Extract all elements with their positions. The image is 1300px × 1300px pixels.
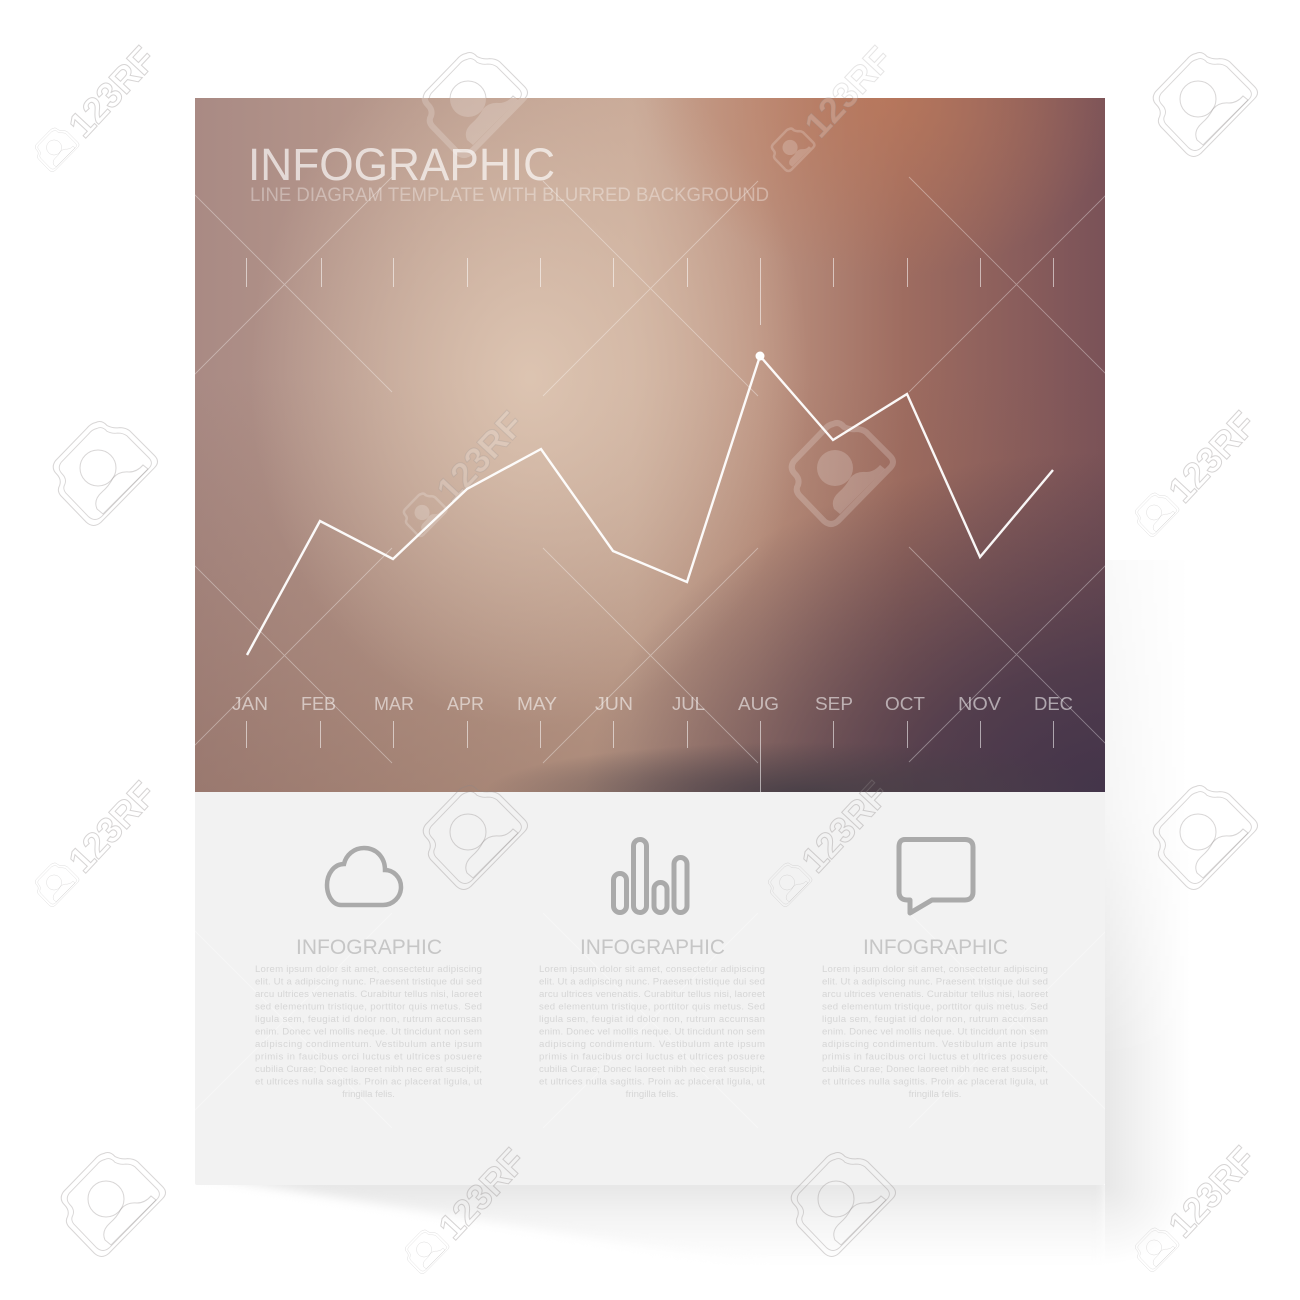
- watermark overlay: 123RF: [60, 773, 164, 880]
- watermark overlay: 123RF: [60, 38, 164, 145]
- column 3 body: adipiscing condimentum. Vestibulum ante ipsum: [822, 1039, 1048, 1050]
- month labels: JUN: [595, 694, 633, 714]
- column 1 body: enim. Donec vel mollis neque. Ut tincidunt non sem: [255, 1026, 482, 1037]
- watermark overlay: 123RF: [430, 1140, 534, 1247]
- column 3 body: et ultrices nulla sagittis. Proin ac placerat ligula, ut: [822, 1076, 1048, 1087]
- month labels: SEP: [815, 694, 853, 714]
- column 1 body: primis in faucibus orci luctus et ultrices posuere: [255, 1051, 482, 1062]
- column 2 heading: INFOGRAPHIC: [580, 936, 725, 959]
- icon: bar chart: [614, 840, 687, 912]
- watermark overlay: 123RF: [796, 38, 900, 145]
- month labels: JAN: [232, 694, 268, 714]
- column 1 text: [255, 936, 482, 1100]
- column 3 body: elit. Ut a adipiscing nunc. Praesent tristique dui sed: [822, 976, 1048, 988]
- column 3 body: sed elementum tristique, porttitor quis metus. Sed: [822, 1001, 1048, 1012]
- watermark overlay: 123RF: [793, 773, 897, 880]
- watermark overlay: 123RF: [1160, 403, 1264, 510]
- watermark overlay: 123RF: [428, 403, 532, 510]
- month labels: AUG: [738, 694, 779, 714]
- line chart: [247, 352, 1053, 655]
- column 2 text: [539, 936, 765, 1100]
- column 1 heading: INFOGRAPHIC: [296, 936, 442, 959]
- column 2 body: ligula sem, feugiat id dolor non, rutrum accumsan: [539, 1014, 765, 1025]
- month labels: APR: [447, 694, 484, 714]
- column 3 body: ligula sem, feugiat id dolor non, rutrum accumsan: [822, 1014, 1048, 1025]
- column 1 body: et ultrices nulla sagittis. Proin ac placerat ligula, ut: [255, 1076, 482, 1087]
- month labels: NOV: [958, 694, 1001, 714]
- column 1 body: arcu ultrices venenatis. Curabitur tellus nisi, laoreet: [255, 989, 482, 1000]
- icon: speech bubble: [899, 840, 973, 913]
- top tick marks: [246, 258, 1054, 325]
- month labels: MAY: [517, 694, 557, 714]
- column 1 body: Lorem ipsum dolor sit amet, consectetur adipiscing: [255, 964, 482, 975]
- highlighted data point: [756, 352, 764, 360]
- column 3 body: Lorem ipsum dolor sit amet, consectetur adipiscing: [822, 964, 1048, 975]
- column 3 body: arcu ultrices venenatis. Curabitur tellus nisi, laoreet: [822, 989, 1048, 1000]
- column 3 text: [822, 936, 1048, 1100]
- subtitle: LINE DIAGRAM TEMPLATE WITH BLURRED BACKGROUND: [250, 185, 769, 206]
- month labels: OCT: [885, 694, 925, 714]
- column 2 body: Lorem ipsum dolor sit amet, consectetur adipiscing: [539, 964, 765, 975]
- bottom tick marks: [246, 721, 1054, 792]
- drop shadow under the sheet: [248, 734, 1158, 1236]
- watermark overlay: 123RF: [1160, 1138, 1264, 1245]
- column 1 body: adipiscing condimentum. Vestibulum ante ipsum: [255, 1039, 482, 1050]
- column 2 body: adipiscing condimentum. Vestibulum ante ipsum: [539, 1039, 765, 1050]
- icon: cloud: [327, 848, 401, 905]
- column 3 body: fringilla felis.: [909, 1089, 961, 1100]
- month labels: [232, 694, 1073, 714]
- column 2 body: et ultrices nulla sagittis. Proin ac placerat ligula, ut: [539, 1076, 765, 1087]
- header text: [248, 139, 769, 206]
- column 3 body: [822, 964, 1048, 1100]
- column 1 body: ligula sem, feugiat id dolor non, rutrum accumsan: [255, 1014, 482, 1025]
- month labels: DEC: [1034, 694, 1073, 714]
- column 2 body: elit. Ut a adipiscing nunc. Praesent tristique dui sed: [539, 976, 765, 988]
- column 1 body: sed elementum tristique, porttitor quis metus. Sed: [255, 1001, 482, 1012]
- column 3 body: enim. Donec vel mollis neque. Ut tincidunt non sem: [822, 1026, 1048, 1037]
- column 2 body: sed elementum tristique, porttitor quis metus. Sed: [539, 1001, 765, 1012]
- column 2 body: [539, 964, 765, 1100]
- panel: lower grey section: [195, 792, 1105, 1185]
- column 1 body: elit. Ut a adipiscing nunc. Praesent tristique dui sed: [255, 976, 482, 988]
- column 1 body: [255, 964, 482, 1100]
- column 3 body: cubilia Curae; Donec laoreet nibh nec erat suscipit,: [822, 1064, 1048, 1075]
- column 3 heading: INFOGRAPHIC: [863, 936, 1008, 959]
- column 2 body: fringilla felis.: [626, 1089, 678, 1100]
- month labels: MAR: [374, 694, 414, 714]
- column 2 body: arcu ultrices venenatis. Curabitur tellus nisi, laoreet: [539, 989, 765, 1000]
- month labels: FEB: [301, 694, 336, 714]
- panel: blurred gradient chart background: [195, 98, 1105, 792]
- title: INFOGRAPHIC: [248, 139, 555, 190]
- column 1 body: cubilia Curae; Donec laoreet nibh nec erat suscipit,: [255, 1064, 482, 1075]
- column 2 body: cubilia Curae; Donec laoreet nibh nec erat suscipit,: [539, 1064, 765, 1075]
- column 3 body: primis in faucibus orci luctus et ultrices posuere: [822, 1051, 1048, 1062]
- column 1 body: fringilla felis.: [342, 1089, 395, 1100]
- column 2 body: enim. Donec vel mollis neque. Ut tincidunt non sem: [539, 1026, 765, 1037]
- month labels: JUL: [672, 694, 705, 714]
- column 2 body: primis in faucibus orci luctus et ultrices posuere: [539, 1051, 765, 1062]
